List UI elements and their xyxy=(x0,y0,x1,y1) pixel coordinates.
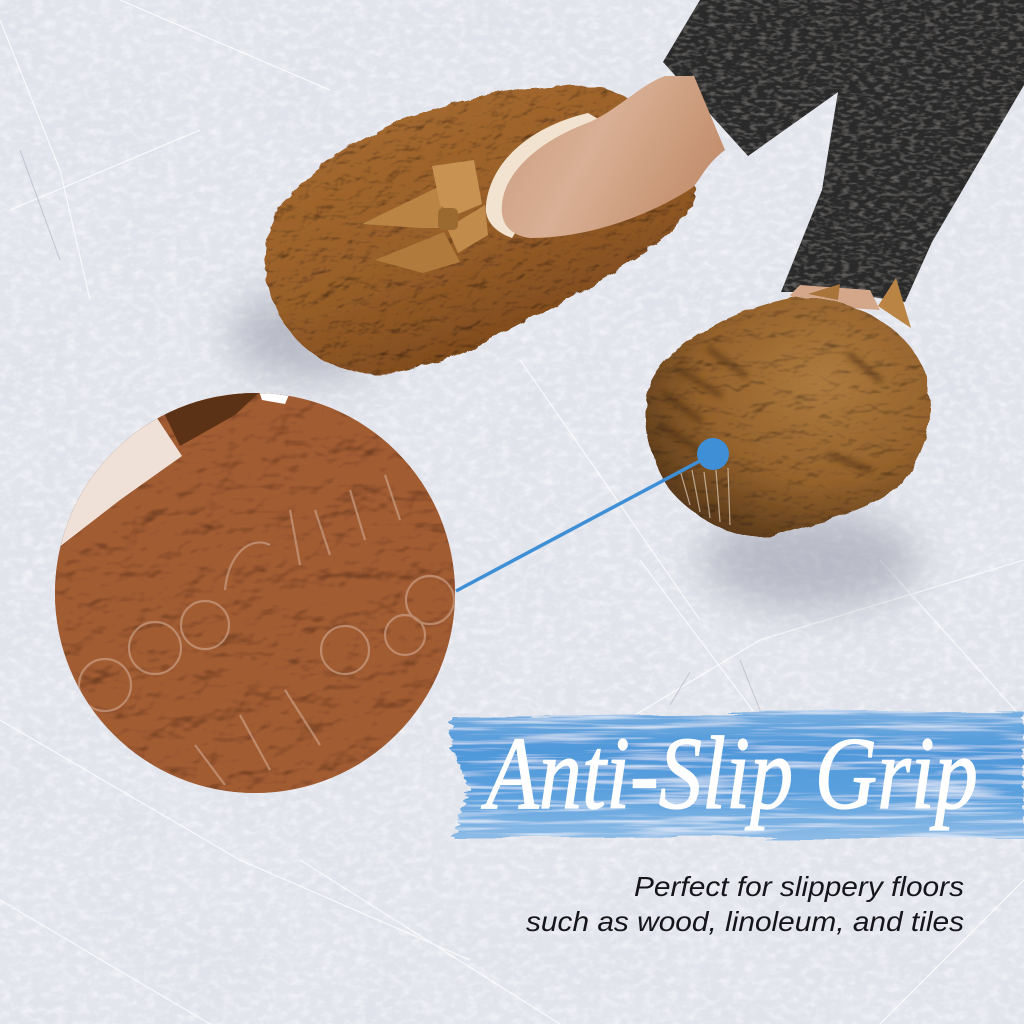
connector line with dot xyxy=(456,438,729,591)
foot xyxy=(502,76,725,238)
sole grip marks xyxy=(680,468,730,525)
subtitle xyxy=(526,871,964,937)
sole dark tufts xyxy=(660,350,880,470)
bow xyxy=(362,160,488,273)
slipper lining xyxy=(486,113,600,238)
subtitle: Perfect for slippery floors xyxy=(634,871,964,902)
sleeves: both arms xyxy=(663,0,1024,302)
slipper: top view xyxy=(265,76,725,374)
subtitle: such as wood, linoleum, and tiles xyxy=(526,906,964,937)
heel skin xyxy=(790,285,880,310)
slipper: sole view xyxy=(645,278,930,537)
shadow: slippers xyxy=(230,290,920,610)
lens: rubber grip letters xyxy=(79,475,454,785)
zoom lens: grip detail xyxy=(50,388,460,798)
sole xyxy=(645,297,930,537)
brush stroke banner xyxy=(452,712,1024,838)
lens corner: white lining xyxy=(60,418,182,546)
heel ribbon xyxy=(878,278,911,328)
